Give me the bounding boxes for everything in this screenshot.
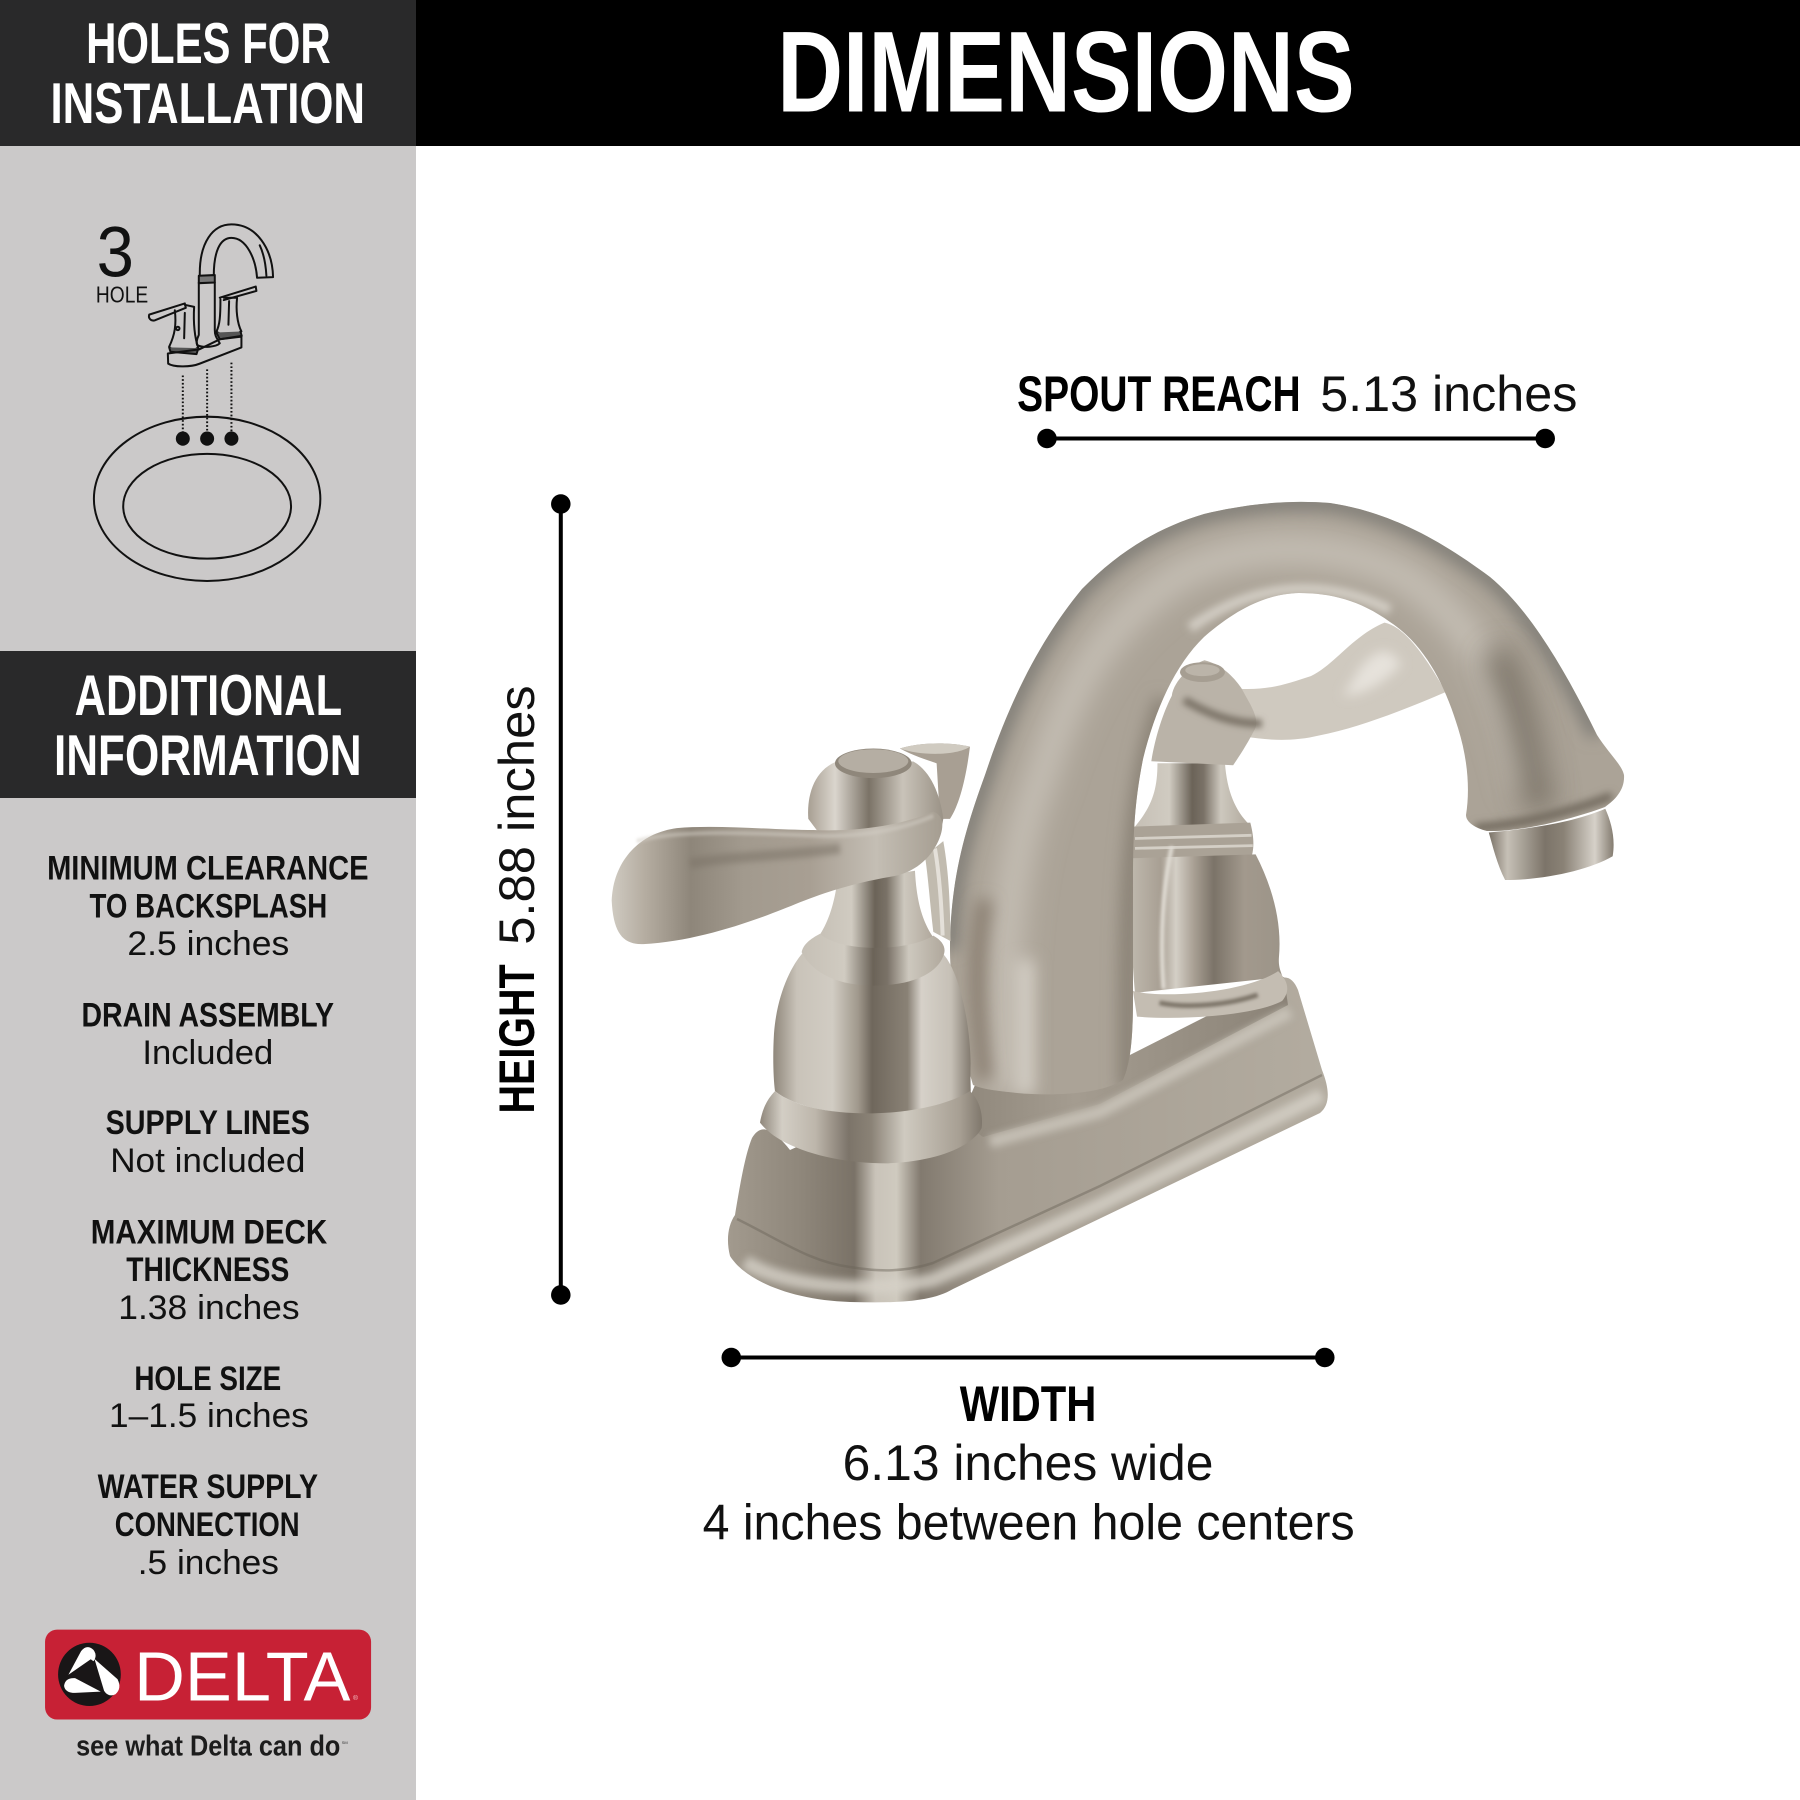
knob xyxy=(808,761,943,867)
spec: drain assembly: Included xyxy=(142,1034,273,1072)
rear collar xyxy=(1133,823,1253,864)
text block: additional information list xyxy=(47,849,369,1582)
knob cap xyxy=(835,749,912,778)
label: height xyxy=(488,685,545,1114)
heading: additional information: ADDITIONAL xyxy=(75,664,342,728)
spec: maximum deck thickness: 1.38 inches xyxy=(118,1289,300,1327)
label: spout reach: SPOUT REACH xyxy=(1017,365,1301,422)
spec: water supply connection: WATER SUPPLY xyxy=(98,1468,318,1506)
logo: delta: SM xyxy=(342,1740,348,1745)
panel: left sidebar xyxy=(0,0,416,1800)
heading: holes for installation: HOLES FOR xyxy=(86,12,331,76)
arrow: spout reach dimension line xyxy=(1037,429,1555,448)
bell xyxy=(773,952,971,1114)
spec: water supply connection: CONNECTION xyxy=(115,1506,300,1544)
label: width: 4 inches between hole centers xyxy=(703,1493,1355,1550)
front handle xyxy=(612,743,982,1163)
label: height: HEIGHT xyxy=(488,964,545,1114)
title: dimensions: DIMENSIONS xyxy=(777,8,1355,136)
lever xyxy=(612,811,942,944)
title bar xyxy=(416,0,1800,146)
logo: delta: ® xyxy=(353,1694,358,1702)
spec: hole size: 1–1.5 inches xyxy=(109,1397,309,1435)
label: width xyxy=(703,1375,1355,1550)
label: width: 6.13 inches wide xyxy=(843,1434,1213,1491)
rear stem xyxy=(1135,763,1249,827)
flange xyxy=(760,1091,982,1163)
spec: maximum deck thickness: THICKNESS xyxy=(126,1251,289,1289)
spec: drain assembly xyxy=(82,996,334,1072)
spec: minimum clearance: MINIMUM CLEARANCE xyxy=(47,849,369,887)
heading: additional information xyxy=(0,651,416,798)
lift rod xyxy=(925,841,951,941)
rear bell xyxy=(1130,854,1282,993)
spout xyxy=(950,502,1624,1095)
icon: three hole faucet and sink diagram xyxy=(94,213,320,581)
logo: delta: DELTA xyxy=(134,1637,351,1715)
spec: water supply connection xyxy=(98,1468,318,1582)
icon: three hole faucet and sink diagram: HOLE xyxy=(96,281,148,307)
faucet photo xyxy=(612,502,1624,1302)
aerator xyxy=(1489,809,1614,880)
base plate xyxy=(728,977,1328,1302)
spec: minimum clearance xyxy=(47,849,369,963)
icon: three hole faucet and sink diagram: 3 xyxy=(97,213,134,293)
label: spout reach: 5.13 inches xyxy=(1320,365,1577,422)
heading: holes for installation xyxy=(0,0,416,146)
rear handle xyxy=(1130,623,1446,1018)
logo: delta xyxy=(45,1630,371,1763)
spec: hole size xyxy=(109,1360,309,1435)
spec: minimum clearance: 2.5 inches xyxy=(127,925,289,963)
spec: drain assembly: DRAIN ASSEMBLY xyxy=(82,996,334,1034)
spec: maximum deck thickness: MAXIMUM DECK xyxy=(91,1213,327,1251)
arrow: width dimension line xyxy=(722,1348,1335,1367)
heading: additional information: INFORMATION xyxy=(54,724,362,788)
label: height: 5.88 inches xyxy=(488,685,545,945)
spec: supply lines: SUPPLY LINES xyxy=(106,1104,310,1142)
label: width: WIDTH xyxy=(960,1375,1096,1432)
spec: minimum clearance: TO BACKSPLASH xyxy=(90,887,327,925)
logo: delta: see what Delta can do xyxy=(76,1730,340,1763)
arrow: height dimension line xyxy=(551,494,571,1305)
heading: holes for installation: INSTALLATION xyxy=(51,72,365,136)
rear knob xyxy=(1151,660,1256,765)
neck xyxy=(817,871,933,952)
rear flange xyxy=(1133,971,1287,1018)
spec: water supply connection: .5 inches xyxy=(138,1544,279,1582)
spec: maximum deck thickness xyxy=(91,1213,327,1327)
label: spout reach xyxy=(1017,365,1577,422)
spec: supply lines xyxy=(106,1104,310,1180)
spec: supply lines: Not included xyxy=(110,1142,305,1180)
collar xyxy=(802,934,945,986)
rear lever xyxy=(1221,623,1446,740)
spec: hole size: HOLE SIZE xyxy=(134,1360,281,1398)
